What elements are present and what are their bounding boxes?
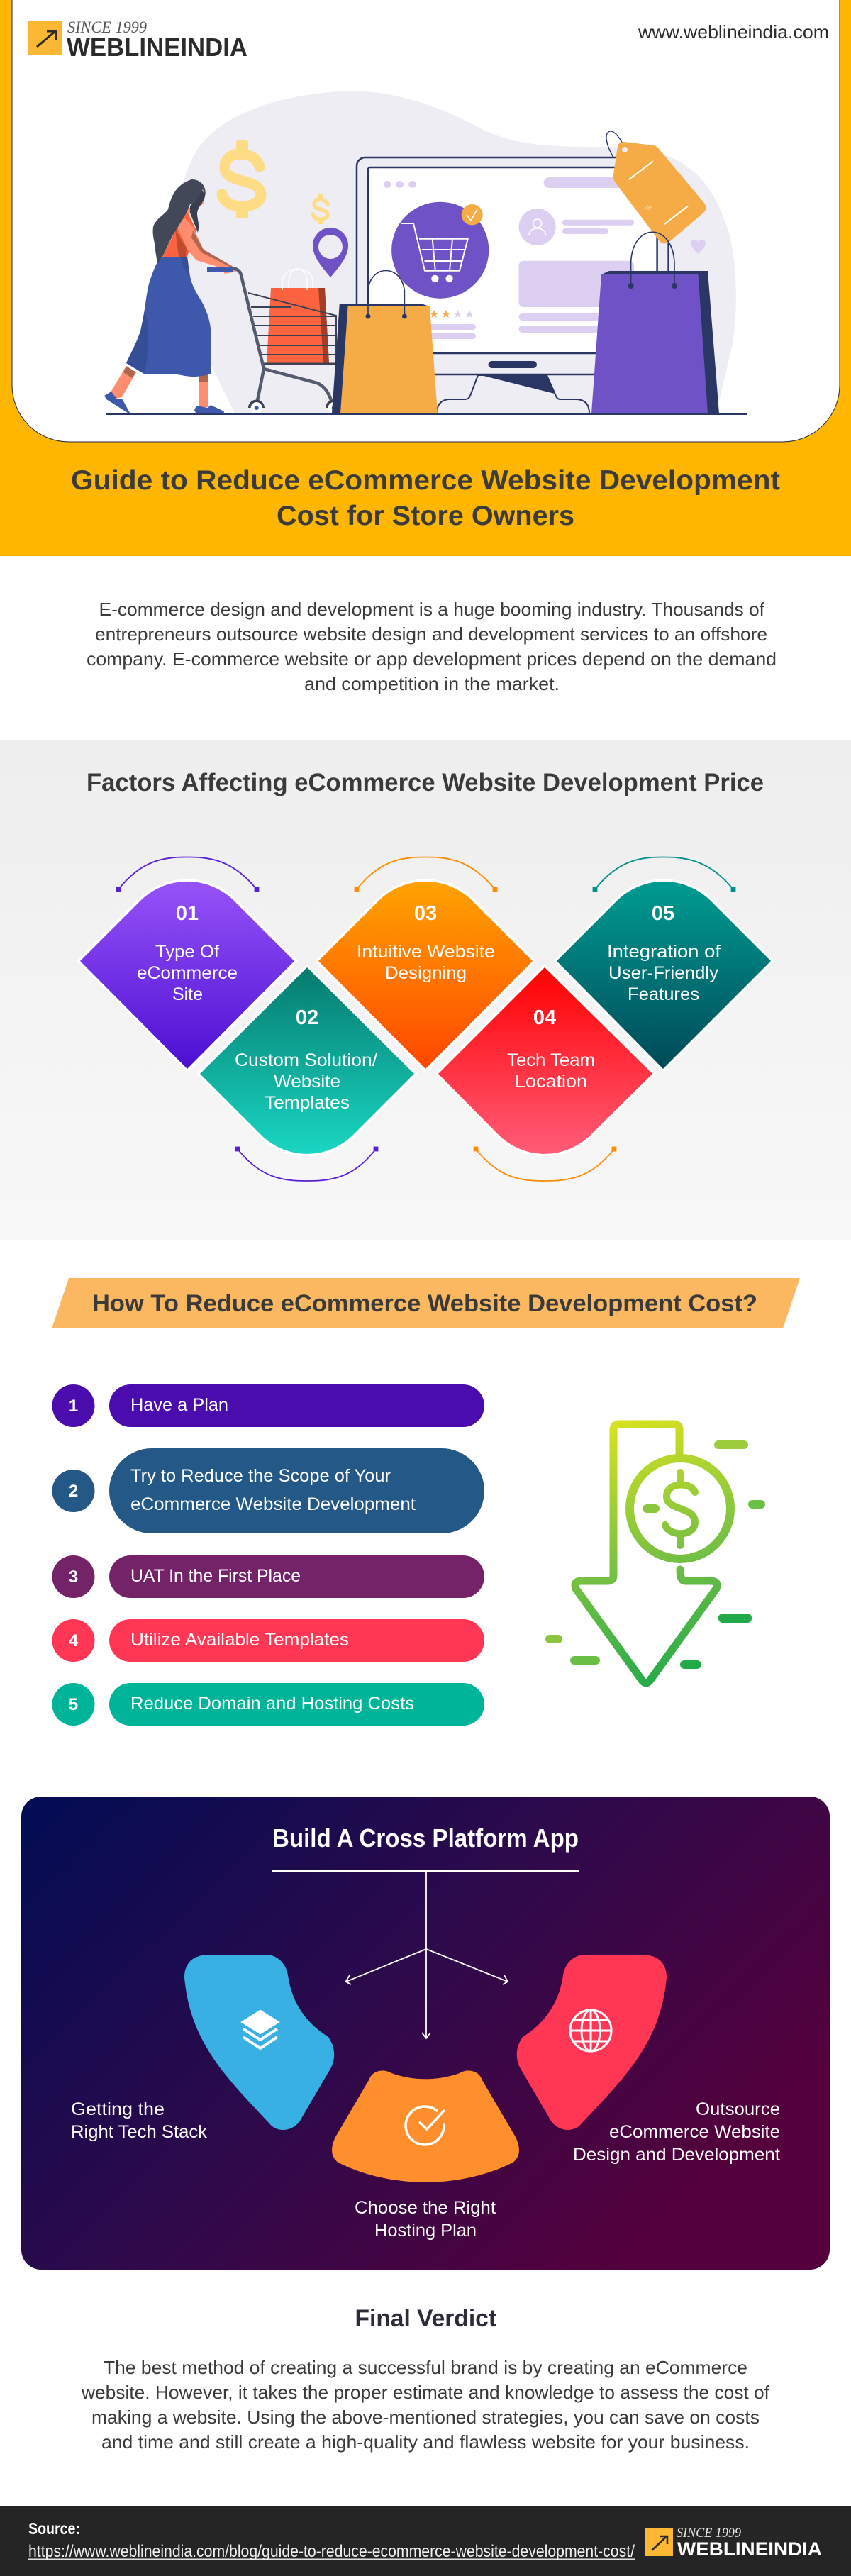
shape: hosting	[332, 2070, 519, 2182]
factors heading: Factors Affecting eCommerce Website Development Price	[87, 769, 764, 796]
label: outsource: Design and Development	[573, 2145, 780, 2165]
factor 05	[557, 882, 771, 1069]
ground line	[106, 413, 747, 415]
panel: factors	[0, 740, 851, 1240]
shopping cart	[207, 267, 342, 413]
step 4: Utilize Available Templates	[130, 1630, 349, 1650]
step 3: 3	[69, 1567, 78, 1587]
website url: www.weblineindia.com	[638, 21, 829, 43]
heart icon	[691, 240, 706, 254]
label: hosting: Hosting Plan	[374, 2221, 477, 2241]
main title: Cost for Store Owners	[277, 501, 574, 531]
footer logo: WEBLINEINDIA	[677, 2538, 822, 2560]
step 5	[52, 1683, 484, 1726]
factor 02: Website	[274, 1072, 340, 1092]
intro paragraph	[87, 599, 777, 694]
intro paragraph: company. E-commerce website or app development prices depend on the demand	[87, 648, 777, 670]
label: hosting	[355, 2198, 496, 2241]
label: outsource: Outsource	[696, 2099, 780, 2119]
hero white panel	[12, 0, 840, 442]
label: outsource	[573, 2099, 780, 2165]
footer logo: SINCE 1999	[677, 2526, 741, 2541]
logo: WEBLINEINDIA	[67, 33, 247, 62]
factor 04: Tech Team	[507, 1050, 595, 1070]
label: hosting: Choose the Right	[355, 2198, 496, 2218]
arc 02	[235, 1148, 377, 1181]
final verdict heading: Final Verdict	[355, 2305, 496, 2332]
factor 04: 04	[533, 1006, 556, 1029]
factor 01	[80, 882, 294, 1069]
intro paragraph: entrepreneurs outsource website design and development services to an offshore	[95, 623, 767, 645]
step 3	[52, 1555, 484, 1598]
label: tech stack: Right Tech Stack	[71, 2122, 208, 2142]
factor 05: User-Friendly	[608, 963, 719, 983]
location pin	[313, 228, 348, 277]
purple cart circle	[391, 202, 489, 299]
step 2: Try to Reduce the Scope of Your	[130, 1466, 391, 1486]
arc 04	[474, 1148, 616, 1181]
factor 02: Templates	[265, 1093, 350, 1113]
branching arrows	[272, 1871, 579, 2038]
icon: layers	[243, 2011, 277, 2048]
step 1: Have a Plan	[130, 1395, 228, 1415]
factor 04	[438, 967, 652, 1154]
rating stars	[442, 310, 474, 318]
footer logo	[645, 2526, 822, 2560]
icon: cost down arrow with dollar	[545, 1424, 765, 1683]
heading banner: how to reduce: How To Reduce eCommerce Website Development Cost?	[92, 1290, 757, 1317]
main title: Guide to Reduce eCommerce Website Development	[71, 465, 780, 496]
big dollar icon	[222, 140, 261, 218]
step 4	[52, 1619, 484, 1662]
factor 03: Intuitive Website	[357, 942, 495, 962]
step 2: eCommerce Website Development	[130, 1494, 416, 1514]
step 2: 2	[69, 1482, 78, 1501]
main title	[71, 465, 780, 531]
icon: check circle	[406, 2106, 444, 2145]
final verdict paragraph: website. However, it takes the proper estimate and knowledge to assess the cost of	[81, 2382, 770, 2403]
factor 03: Designing	[385, 963, 467, 983]
label: tech stack: Getting the	[71, 2099, 165, 2119]
factor 02: 02	[296, 1006, 318, 1029]
factor 05: Integration of	[607, 942, 721, 962]
shape: tech stack	[184, 1955, 334, 2130]
factor 01: 01	[176, 902, 199, 925]
source link: https://www.weblineindia.com/blog/guide-to-reduce-ecommerce-website-development-cost/	[28, 2542, 635, 2561]
price tag: %	[644, 203, 653, 212]
footer	[0, 2506, 851, 2576]
header band	[0, 0, 851, 556]
hero illustration	[104, 91, 747, 415]
panel title: Build A Cross Platform App	[272, 1823, 579, 1853]
label: outsource: eCommerce Website	[609, 2122, 780, 2142]
screen content	[384, 177, 634, 339]
panel: build a cross platform app	[21, 1797, 830, 2270]
step 3: UAT In the First Place	[130, 1566, 301, 1586]
factor 03: 03	[414, 902, 437, 925]
logo	[28, 18, 247, 62]
final verdict paragraph: and time and still create a high-quality and flawless website for your business.	[101, 2431, 750, 2453]
icon: globe	[570, 2010, 611, 2051]
factor 01: Site	[172, 984, 203, 1004]
logo: SINCE 1999	[67, 18, 147, 36]
arc 01	[116, 857, 258, 891]
shape: outsource	[517, 1955, 667, 2130]
monitor	[357, 157, 669, 413]
final verdict paragraph: making a website. Using the above-mentioned strategies, you can save on costs	[91, 2406, 760, 2428]
source label: Source:	[28, 2519, 80, 2538]
arc 05	[593, 857, 735, 891]
heading banner: how to reduce	[52, 1278, 800, 1328]
factor 01: eCommerce	[137, 963, 238, 983]
factor 01: Type Of	[155, 942, 219, 962]
factor 05: Features	[628, 984, 699, 1004]
step 1	[52, 1384, 484, 1427]
purple shopping bag	[591, 232, 719, 413]
step 5: 5	[69, 1695, 78, 1714]
factor 02	[200, 967, 414, 1154]
small dollar icon	[313, 194, 328, 224]
intro paragraph: and competition in the market.	[304, 673, 560, 694]
background blob	[170, 91, 736, 413]
final verdict paragraph	[81, 2357, 770, 2453]
factor 04: Location	[515, 1072, 587, 1092]
arc 03	[355, 857, 496, 891]
step 5: Reduce Domain and Hosting Costs	[130, 1694, 414, 1714]
intro paragraph: E-commerce design and development is a huge booming industry. Thousands of	[99, 599, 765, 620]
step 4: 4	[69, 1631, 79, 1650]
step 2	[52, 1448, 484, 1533]
factor 02: Custom Solution/	[235, 1050, 377, 1070]
step 1: 1	[69, 1397, 78, 1416]
factor 03	[318, 882, 533, 1069]
orange shopping bag	[332, 271, 438, 413]
final verdict paragraph: The best method of creating a successful brand is by creating an eCommerce	[104, 2357, 747, 2378]
price tag	[606, 131, 706, 244]
factor 05: 05	[652, 902, 674, 925]
woman	[104, 179, 236, 414]
label: tech stack	[71, 2099, 208, 2142]
